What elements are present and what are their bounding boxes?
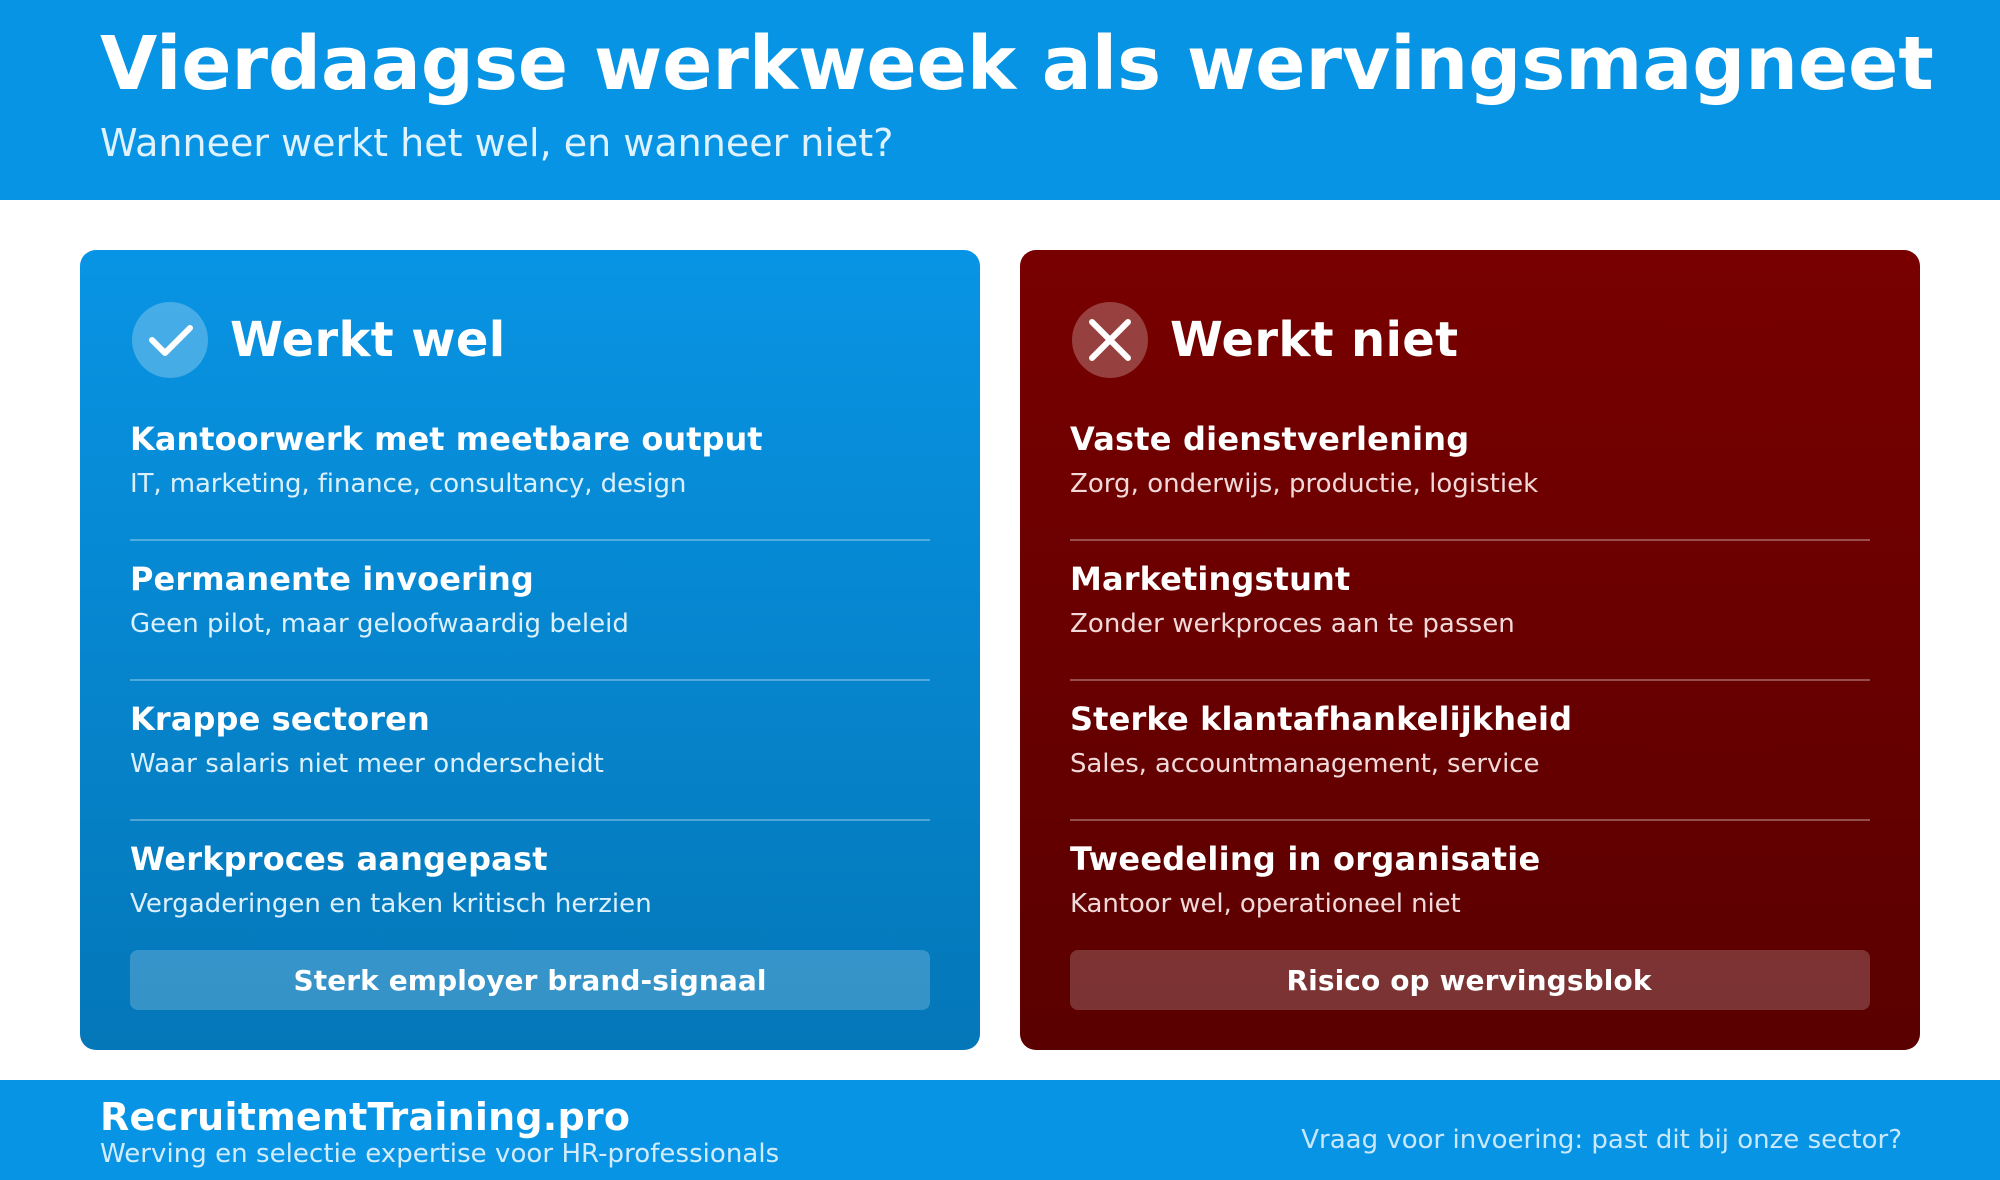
item: werkproces aangepast: Werkproces aangepast bbox=[130, 840, 548, 878]
heading: werkt wel: Werkt wel bbox=[230, 312, 506, 368]
item: werkproces aangepast: Vergaderingen en taken kritisch herzien bbox=[130, 889, 652, 919]
item: werkproces aangepast bbox=[130, 840, 652, 919]
item: marketingstunt: Marketingstunt bbox=[1070, 560, 1350, 598]
item: permanente invoering: Permanente invoering bbox=[130, 560, 534, 598]
callout: wervingsblok bbox=[1070, 950, 1870, 1010]
item: tweedeling: Tweedeling in organisatie bbox=[1070, 840, 1540, 878]
item: tweedeling bbox=[1070, 840, 1540, 919]
item: krappe sectoren: Krappe sectoren bbox=[130, 700, 430, 738]
item: klantafhankelijkheid: Sales, accountmanagement, service bbox=[1070, 749, 1539, 779]
footer brand: RecruitmentTraining.pro bbox=[100, 1095, 630, 1139]
item: kantoorwerk: IT, marketing, finance, consultancy, design bbox=[130, 469, 686, 499]
item: vaste dienstverlening bbox=[1070, 420, 1538, 499]
icon: cross bbox=[1072, 302, 1148, 378]
heading: werkt niet: Werkt niet bbox=[1170, 312, 1458, 368]
title: Vierdaagse werkweek als wervingsmagneet bbox=[100, 21, 1934, 107]
item: krappe sectoren: Waar salaris niet meer onderscheidt bbox=[130, 749, 604, 779]
footer question: Vraag voor invoering: past dit bij onze sector? bbox=[1301, 1125, 1902, 1155]
icon: check mark bbox=[132, 302, 208, 378]
item: vaste dienstverlening: Zorg, onderwijs, productie, logistiek bbox=[1070, 469, 1538, 499]
callout: wervingsblok: Risico op wervingsblok bbox=[1286, 964, 1652, 997]
panel: werkt niet bbox=[1020, 250, 1920, 1050]
item: vaste dienstverlening: Vaste dienstverlening bbox=[1070, 420, 1469, 458]
item: klantafhankelijkheid: Sterke klantafhankelijkheid bbox=[1070, 700, 1572, 738]
item: klantafhankelijkheid bbox=[1070, 700, 1572, 779]
item: kantoorwerk bbox=[130, 420, 763, 499]
item: marketingstunt bbox=[1070, 560, 1515, 639]
item: marketingstunt: Zonder werkproces aan te passen bbox=[1070, 609, 1515, 639]
subtitle: Wanneer werkt het wel, en wanneer niet? bbox=[100, 121, 893, 165]
footer banner bbox=[0, 1080, 2000, 1180]
header banner bbox=[0, 0, 2000, 200]
item: tweedeling: Kantoor wel, operationeel niet bbox=[1070, 889, 1461, 919]
callout: employer brand bbox=[130, 950, 930, 1010]
item: kantoorwerk: Kantoorwerk met meetbare output bbox=[130, 420, 763, 458]
item: permanente invoering: Geen pilot, maar geloofwaardig beleid bbox=[130, 609, 629, 639]
panel: werkt wel bbox=[80, 250, 980, 1050]
footer tagline: Werving en selectie expertise voor HR-professionals bbox=[100, 1139, 779, 1169]
callout: employer brand: Sterk employer brand-signaal bbox=[293, 964, 767, 997]
item: permanente invoering bbox=[130, 560, 629, 639]
item: krappe sectoren bbox=[130, 700, 604, 779]
